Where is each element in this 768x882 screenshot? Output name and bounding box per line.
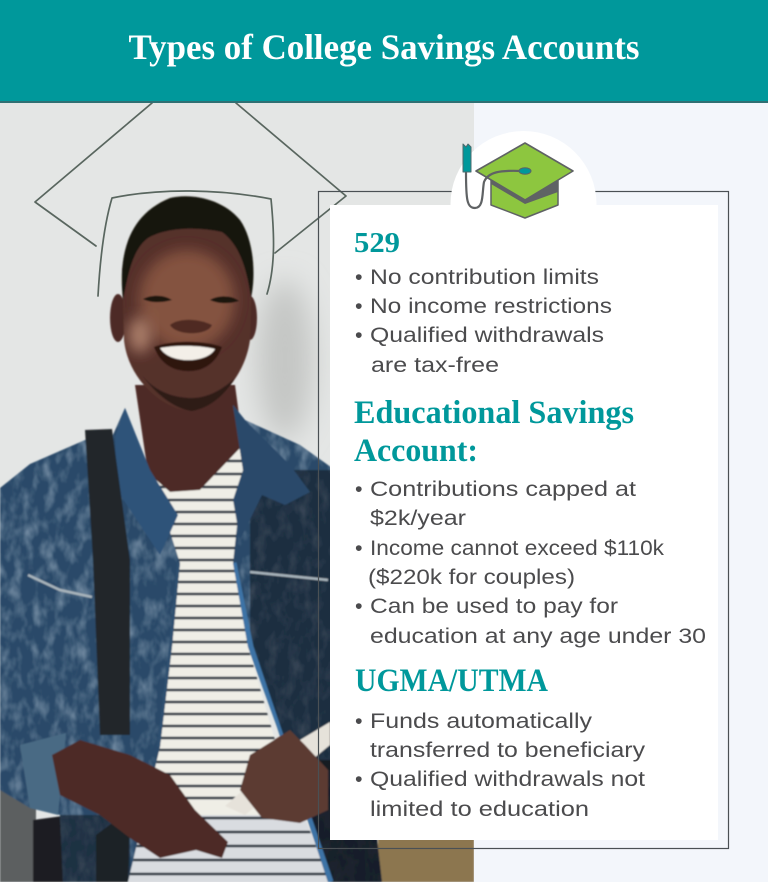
- nose: [170, 320, 212, 333]
- notebook: [225, 722, 330, 815]
- section: Educational Savings Account: Can be used to pay for: [370, 594, 618, 618]
- circle behind icon: [450, 131, 596, 277]
- section: Educational Savings Account: •: [355, 594, 363, 618]
- section: Educational Savings Account: Contributions capped at: [370, 477, 636, 501]
- pockets: [28, 572, 328, 597]
- header band: [0, 0, 768, 103]
- section: Educational Savings Account: $2k/year: [370, 506, 466, 530]
- section: Educational Savings Account: •: [355, 477, 363, 501]
- photo: smiling student with drawn graduation cap: [0, 103, 474, 882]
- section: Educational Savings Account: [354, 395, 706, 648]
- section: UGMA/UTMA: UGMA/UTMA: [355, 663, 548, 699]
- head and face: [122, 228, 252, 386]
- section: Educational Savings Account: Account:: [354, 433, 478, 469]
- eyes: [143, 296, 239, 303]
- section: 529: •: [355, 294, 363, 318]
- wall shadow right of head: [257, 280, 313, 440]
- striped shirt: [127, 448, 329, 882]
- section: UGMA/UTMA: •: [355, 709, 363, 733]
- photo wall: [0, 103, 474, 882]
- mouth and teeth: [154, 342, 222, 371]
- section: 529: No contribution limits: [370, 265, 599, 289]
- section: 529: •: [355, 265, 363, 289]
- face highlight: [128, 250, 235, 353]
- drawn graduation cap on wall: [35, 103, 346, 296]
- section: Educational Savings Account: ($220k for couples): [368, 565, 575, 589]
- section: Educational Savings Account: Income cannot exceed $110k: [370, 536, 664, 560]
- section: 529: •: [355, 323, 363, 347]
- section: 529: Qualified withdrawals: [370, 323, 604, 347]
- section: UGMA/UTMA: Qualified withdrawals not: [370, 767, 645, 791]
- stubble: [146, 379, 234, 412]
- section: Educational Savings Account: •: [355, 536, 363, 560]
- section: 529: No income restrictions: [370, 294, 612, 318]
- section: 529: 529: [354, 228, 400, 259]
- icon: graduation cap: [463, 143, 573, 218]
- section: UGMA/UTMA: Funds automatically: [370, 709, 592, 733]
- bag at lower left: [33, 815, 70, 882]
- left hand: [52, 740, 228, 858]
- shoulder bag strap: [85, 429, 130, 735]
- section: UGMA/UTMA: transferred to beneficiary: [370, 738, 645, 762]
- bottom background: bricks: [378, 838, 474, 882]
- section: UGMA/UTMA: •: [355, 767, 363, 791]
- title: Types of College Savings Accounts: [128, 27, 640, 67]
- right hand: [240, 730, 328, 823]
- jacket cuff: [20, 733, 66, 815]
- jacket placket: [233, 563, 330, 882]
- denim jacket: [0, 400, 400, 882]
- white content card: [330, 205, 718, 840]
- section: UGMA/UTMA: limited to education: [370, 797, 589, 821]
- neck: [135, 385, 243, 492]
- section: Educational Savings Account: education at any age under 30: [370, 624, 706, 648]
- jacket collar: [115, 408, 178, 555]
- ears: [110, 294, 126, 342]
- section: 529: are tax-free: [371, 353, 499, 377]
- section: Educational Savings Account: Educational Savings: [354, 395, 634, 431]
- section: 529: [354, 228, 612, 377]
- frame outline: [318, 192, 728, 848]
- hair: [122, 196, 253, 300]
- bottom background: grey surface: [0, 788, 36, 882]
- section: UGMA/UTMA: [355, 663, 645, 821]
